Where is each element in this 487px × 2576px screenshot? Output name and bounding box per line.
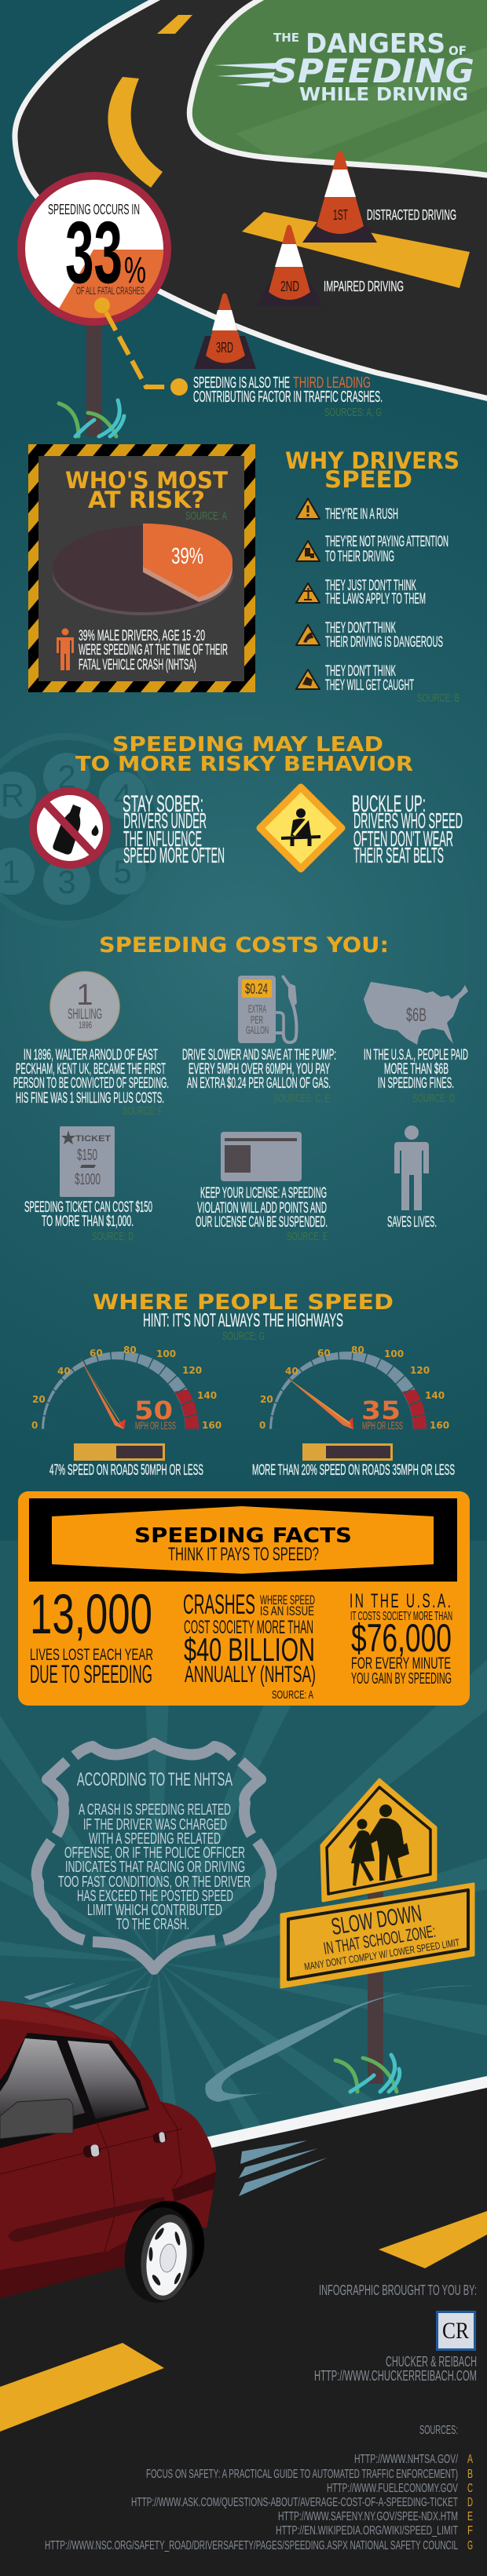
shield text: ACCORDING TO THE NHTSA (77, 1769, 233, 1790)
third leading factor text (193, 374, 383, 419)
speedometer: 50 mph: 100 (156, 1348, 176, 1359)
bar: 47 percent: 47% SPEED ON ROADS 50MPH OR LESS (49, 1462, 203, 1479)
icon: driver license (221, 1132, 302, 1181)
fact: cost of crashes: CRASHES (183, 1589, 255, 1620)
shield text: TO THE CRASH. (116, 1916, 189, 1933)
heading: WHO'S MOST (65, 467, 228, 494)
text: first conviction: SOURCE: F (123, 1104, 163, 1118)
cone: 3rd: 3RD (216, 340, 233, 356)
sources list: E (467, 2510, 473, 2523)
gear shift background: 1 (2, 853, 20, 890)
buckle up text (352, 791, 463, 867)
text: ticket cost: TO MORE THAN $1,000. (42, 1213, 134, 1230)
icon: USA map (364, 982, 468, 1045)
door details (0, 2102, 182, 2254)
sources list: D (467, 2496, 473, 2509)
speedometer: 50 mph: 0 (31, 1420, 38, 1431)
shield text: TOO FAST CONDITIONS, OR THE DRIVER (58, 1874, 251, 1891)
sign: 33 percent of fatal crashes: 33 (65, 203, 123, 301)
speedometer: 50 mph: 80 (123, 1345, 137, 1356)
icon: grass (335, 2055, 400, 2092)
text: gas savings: DRIVE SLOWER AND SAVE AT THE PUMP: (182, 1047, 336, 1064)
fact: cost of crashes (183, 1589, 316, 1702)
shield: according to the NHTSA (37, 1743, 271, 1969)
sign: slow down (281, 1884, 474, 1987)
bar: 20 percent (252, 1443, 455, 1479)
post of the percentage sign (86, 322, 102, 436)
icon: shilling coin: 1896 (79, 1020, 92, 1031)
icon: shilling coin: SHILLING (68, 1006, 102, 1022)
heading: speeding costs you: SPEEDING COSTS YOU: (99, 933, 389, 958)
dashed leader line (94, 297, 188, 396)
gear shift background: 5 (113, 853, 132, 890)
title (214, 28, 474, 105)
speedometer: 35 mph: 60 (317, 1348, 331, 1359)
icon: shilling coin: 1 (76, 979, 93, 1012)
car window frame (0, 2033, 149, 2148)
text: SAVES LIVES. (387, 1214, 437, 1231)
title: SPEEDING (272, 52, 474, 90)
speed lines above car (24, 1983, 155, 2009)
sources list: G (467, 2539, 473, 2552)
text: speeding fines: SOURCE: D (412, 1092, 455, 1105)
sign text (297, 1896, 460, 1972)
shield text: LIMIT WHICH CONTRIBUTED (87, 1902, 222, 1919)
icon: ticket (60, 1126, 115, 1197)
figures (349, 1804, 409, 1886)
heading: where people speed: WHERE PEOPLE SPEED (93, 1290, 394, 1315)
icon: gas pump: EXTRA (248, 1002, 266, 1015)
car body (0, 2001, 216, 2298)
banner: THINK IT PAYS TO SPEED? (168, 1544, 319, 1565)
text: keep your license: VIOLATION WILL ADD POINTS AND (197, 1200, 327, 1217)
reasons list: TO THEIR DRIVING (325, 549, 394, 565)
lower road markings (0, 2211, 487, 2432)
icon: shilling coin (50, 972, 119, 1041)
speedometer: 35 mph (259, 1345, 449, 1432)
heading: speeding may lead to more risky behavior (75, 733, 413, 776)
shield text: WITH A SPEEDING RELATED (89, 1830, 221, 1848)
stay sober text (123, 791, 225, 867)
icon: gas pump (238, 975, 297, 1043)
gear shift background (0, 733, 164, 928)
side mirror (0, 2099, 73, 2139)
cone: 2nd (256, 224, 323, 306)
winding road (15, 0, 487, 402)
sign: 33 percent of fatal crashes (21, 176, 167, 322)
fact: cost per minute: IN THE U.S.A. (350, 1590, 451, 1612)
reasons list: SOURCE: B (417, 691, 460, 705)
speedometer: 50 mph: 20 (32, 1394, 46, 1405)
third leading factor text: SPEEDING IS ALSO THE (193, 374, 290, 392)
text: first conviction: IN 1896, WALTER ARNOLD OF EAST (24, 1047, 158, 1064)
statistic text: FATAL VEHICLE CRASH (NHTSA) (79, 657, 196, 673)
sign: 33 percent of fatal crashes: SPEEDING OCCURS IN (48, 202, 140, 217)
gear shift background: 4 (113, 777, 132, 814)
third leading factor text: SOURCES: A, G (324, 406, 382, 419)
icon: gas pump: GALLON (246, 1023, 269, 1036)
icon glyphs (302, 505, 314, 686)
fact: cost of crashes: $40 BILLION (184, 1631, 315, 1668)
label: impaired driving: IMPAIRED DRIVING (324, 279, 404, 294)
sign text: SLOW DOWN (329, 1900, 423, 1940)
text: keep your license: SOURCE: E (287, 1230, 328, 1243)
cone: 3rd (194, 294, 256, 369)
gear shift background: 2 (57, 758, 76, 795)
fact: cost of crashes: SOURCE: A (272, 1688, 313, 1702)
sources list: SOURCES: (419, 2424, 458, 2437)
panel: who's most at risk: AT RISK? (88, 487, 205, 513)
stay sober text: DRIVERS UNDER (123, 808, 207, 833)
fact: cost of crashes: WHERE SPEED (260, 1593, 315, 1607)
icon: grass (59, 400, 124, 436)
shield text: IF THE DRIVER WAS CHARGED (83, 1816, 227, 1833)
stay sober text: THE INFLUENCE (123, 826, 202, 851)
speedometer: 35 mph: 160 (430, 1420, 449, 1431)
speedometer: 35 mph: 120 (410, 1365, 430, 1376)
fact: lives lost: LIVES LOST EACH YEAR (30, 1646, 153, 1664)
text: first conviction (13, 1047, 169, 1118)
cone: 1st: 1ST (333, 207, 348, 223)
sign: school crossing (321, 1779, 436, 1901)
text: ticket cost: SOURCE: D (92, 1230, 134, 1243)
sources list: F (467, 2524, 473, 2538)
shield text: INDICATES THAT RACING OR DRIVING (65, 1859, 245, 1876)
icon: USA map: $6B (406, 1005, 427, 1026)
icon: seat belt sign (260, 787, 342, 869)
title: WHILE DRIVING (299, 85, 468, 105)
icon: gas pump: $0.24 (245, 981, 268, 997)
heading: speeding may lead to more risky behavior: TO MORE RISKY BEHAVIOR (75, 753, 413, 776)
text: gas savings (182, 1047, 336, 1105)
speedometer: 50 mph: 140 (197, 1390, 217, 1401)
fact: cost of crashes: COST SOCIETY MORE THAN (184, 1617, 313, 1638)
icon: ticket: TICKET (75, 1134, 111, 1144)
shield text: OFFENSE, OR IF THE POLICE OFFICER (64, 1844, 245, 1862)
icon: ticket: $1000 (75, 1171, 101, 1188)
sources list: B (467, 2468, 473, 2481)
text: gas savings: EVERY 5MPH OVER 60MPH, YOU PAY (189, 1061, 330, 1078)
speedometer: 50 mph: MPH OR LESS (135, 1419, 176, 1432)
panel: who's most at risk: SOURCE: A (185, 509, 227, 523)
text: first conviction: HIS FINE WAS 1 SHILLING PLUS COSTS. (16, 1090, 164, 1107)
statistic text: 39% MALE DRIVERS, AGE 15 -20 (79, 628, 205, 644)
road markings (108, 15, 470, 288)
text: ticket cost (24, 1199, 152, 1243)
side trim (9, 2197, 165, 2242)
speedometer: 35 mph: 140 (425, 1390, 445, 1401)
heading: where people speed: SOURCE: G (222, 1330, 265, 1343)
reasons list (325, 506, 460, 705)
car (0, 2001, 216, 2308)
speedometer: 35 mph: 0 (259, 1420, 265, 1431)
text: keep your license: OUR LICENSE CAN BE SUSPENDED. (196, 1214, 328, 1231)
title: OF (449, 43, 467, 58)
speedometer: 35 mph: 80 (351, 1345, 364, 1356)
speedometer: 35 mph: 35 (361, 1396, 401, 1425)
background sunburst rays (0, 1256, 487, 2576)
statistic text (79, 628, 228, 673)
text: PERSON TO BE CONVICTED OF SPEEDING. (13, 1075, 169, 1092)
logo: CR (442, 2318, 469, 2344)
gear shift background: 3 (57, 863, 76, 900)
heading: speeding may lead to more risky behavior: SPEEDING MAY LEAD (112, 733, 383, 757)
sources list: A (467, 2453, 473, 2466)
sources list (45, 2424, 473, 2552)
text: first conviction: PECKHAM, KENT UK, BECAME THE FIRST (16, 1061, 166, 1078)
text: keep your license: KEEP YOUR LICENSE: A SPEEDING (200, 1185, 327, 1202)
car window glass (0, 2038, 85, 2135)
title: DANGERS (306, 28, 445, 60)
heading: WHY DRIVERS (285, 447, 460, 474)
speedometer: 50 mph: 160 (202, 1420, 222, 1431)
stay sober text: STAY SOBER: (123, 791, 203, 817)
speedometer: 35 mph: MPH OR LESS (362, 1419, 403, 1432)
speedometer: 50 mph: 50 (134, 1396, 173, 1425)
logo (437, 2312, 474, 2350)
heading: where people speed (93, 1290, 394, 1343)
sign: 33 percent of fatal crashes: % (124, 249, 146, 290)
credit (314, 2282, 477, 2384)
icon: no alcohol sign (33, 791, 107, 865)
lower road (0, 2076, 487, 2576)
third leading factor text: THIRD LEADING (293, 374, 371, 392)
reasons list: THEY'RE IN A RUSH (325, 506, 398, 523)
icon: gas pump: PER (251, 1013, 263, 1026)
fact: cost of crashes: ANNUALLY (NHTSA) (185, 1662, 316, 1688)
text: SPEED MORE OFTEN (123, 843, 225, 867)
panel: why drivers speed (285, 447, 460, 705)
speedometer: 35 mph: 40 (285, 1366, 298, 1377)
pie chart (53, 524, 233, 615)
speedometer: 35 mph: 20 (260, 1394, 273, 1405)
text: keep your license (196, 1185, 328, 1243)
speedometer: 50 mph: 40 (57, 1366, 71, 1377)
reasons list: THEY DON'T THINK (325, 663, 396, 680)
banner: SPEEDING FACTS (134, 1524, 352, 1548)
cone: 1st (302, 151, 377, 243)
icon: ticket: $150 (77, 1147, 97, 1164)
icons: warning triangles (296, 498, 320, 689)
bar: 47 percent (49, 1443, 203, 1479)
cone: 2nd: 2ND (280, 279, 299, 294)
title: THE (273, 31, 299, 45)
text: ticket cost: SPEEDING TICKET CAN COST $150 (24, 1199, 152, 1216)
reasons list: THEY DON'T THINK (325, 620, 396, 637)
school sign post (368, 1892, 383, 2084)
text: speeding fines (364, 1047, 468, 1105)
fact: lives lost (30, 1584, 153, 1688)
wheel (119, 2196, 210, 2308)
sources list: C (467, 2482, 473, 2495)
icon: person (57, 628, 74, 670)
shield text (58, 1769, 251, 1933)
speedometer: 50 mph (31, 1345, 222, 1432)
fact: lives lost: DUE TO SPEEDING (30, 1660, 152, 1688)
fact: cost of crashes: IS AN ISSUE (260, 1604, 314, 1618)
sign: 33 percent of fatal crashes: OF ALL FATAL CRASHES. (76, 284, 146, 297)
shield outline (37, 1743, 271, 1969)
shield text: A CRASH IS SPEEDING RELATED (79, 1801, 231, 1819)
shield text: HAS EXCEED THE POSTED SPEED (77, 1888, 233, 1905)
text: gas savings: AN EXTRA $0.24 PER GALLON OF GAS. (187, 1075, 331, 1092)
panel: speeding facts (18, 1491, 470, 1706)
banner (29, 1498, 457, 1582)
fact: lives lost: 13,000 (30, 1584, 152, 1646)
speedometer: 35 mph: 100 (384, 1348, 404, 1359)
pie chart: 39% (171, 544, 203, 569)
panel: why drivers speed: SPEED (324, 466, 412, 493)
fact: cost per minute (350, 1590, 452, 1688)
speedometer: 50 mph: 120 (182, 1365, 202, 1376)
grass field (157, 0, 487, 188)
icon: swoosh (205, 1986, 476, 2102)
speed lines behind car (239, 2140, 328, 2196)
statistic text: WERE SPEEDING AT THE TIME OF THEIR (79, 642, 228, 659)
text: gas savings: SOURCES: C, E (273, 1092, 330, 1105)
icon: person grey (394, 1126, 429, 1210)
panel: who's most at risk (28, 444, 255, 692)
speedometer: 50 mph: 60 (90, 1348, 103, 1359)
gear shift background: R (1, 777, 24, 814)
